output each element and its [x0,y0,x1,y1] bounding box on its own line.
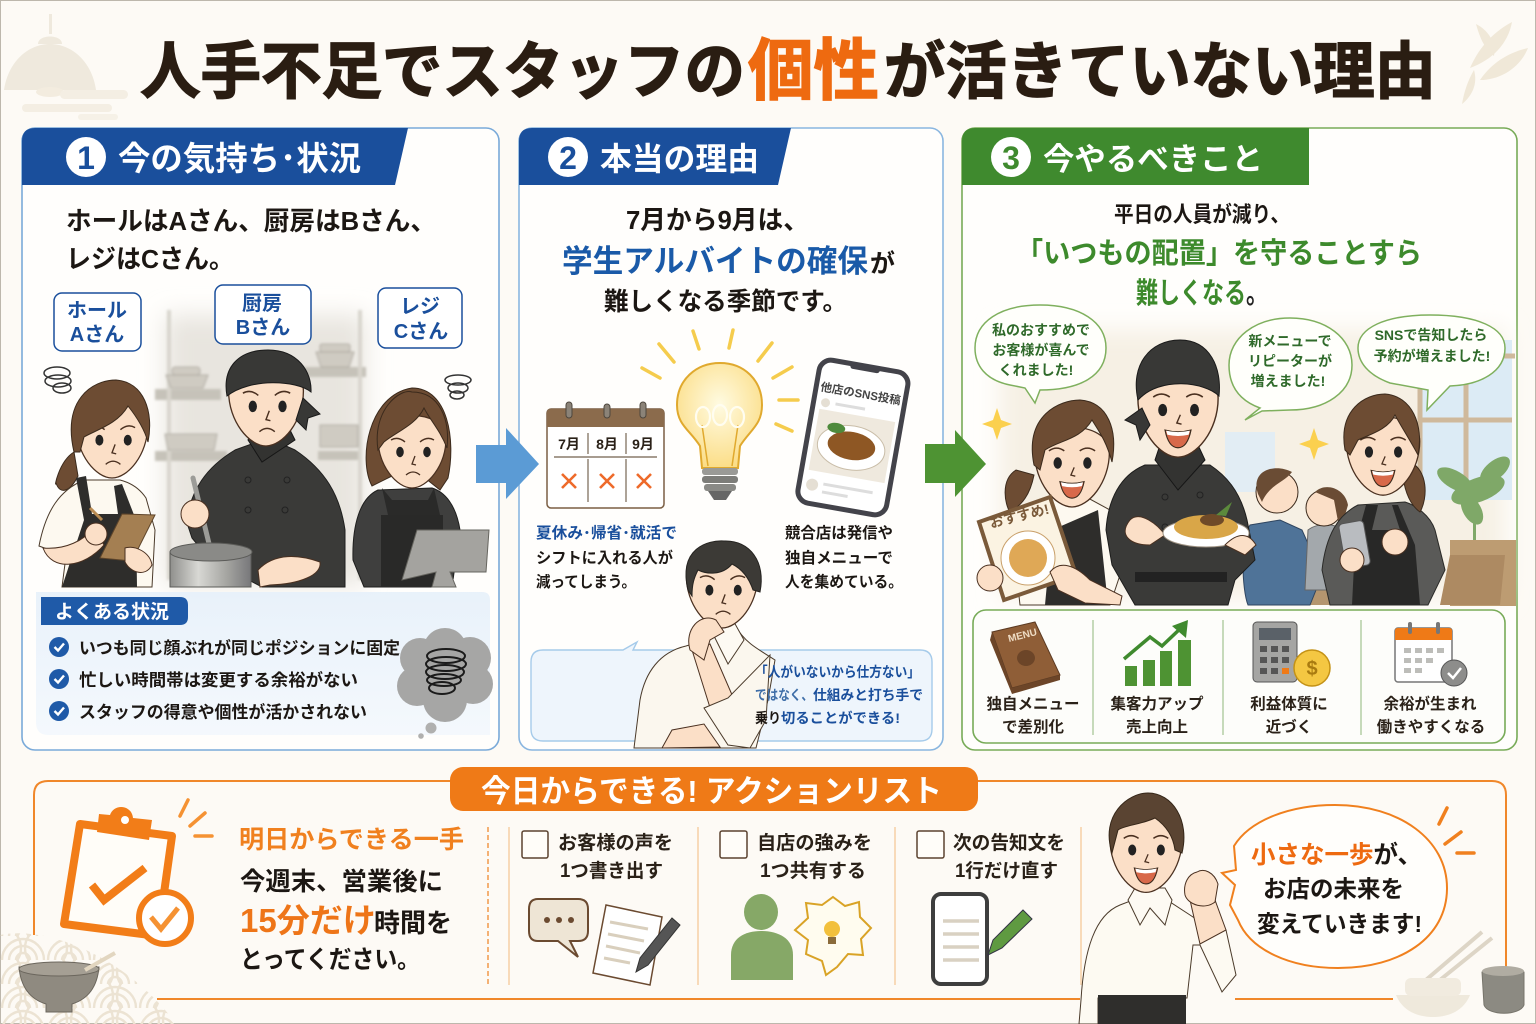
benefit: original menu: MENU [1007,627,1038,645]
situation item 2: 忙しい時間帯は変更する余裕がない [79,670,358,690]
panel 3 intro text: 難しくなる。 [1136,277,1268,310]
text: competitor reason: 独自メニューで [785,549,893,567]
benefit: sales up [1110,620,1204,736]
worry scribble icons [44,367,471,399]
action panel frame [34,781,1506,999]
speech bubble: new menu: リピーターが [1248,353,1332,369]
benefit: room to work: 余裕が生まれ [1383,694,1477,713]
title: 個性 [748,34,879,109]
sparkles [982,408,1329,460]
icon: calendar: 8月 [596,436,618,452]
action item: announcement: 1行だけ直す [955,860,1058,882]
speech bubble: recommendation: 私のおすすめで [992,322,1090,338]
benefit: room to work [1377,622,1485,736]
situation item 1: いつも同じ顔ぶれが同じポジションに固定 [79,638,400,658]
action item: store strengths: 1つ共有する [760,860,866,882]
icon: calendar [547,402,664,508]
action item: customer voice: 1つ書き出す [560,859,663,882]
panel 2 header: 本当の理由 [600,141,759,177]
icon: calendar: 9月 [632,436,654,452]
character: hall staff A [39,380,155,587]
label: hall [54,293,141,351]
character: staff with recommendation board [977,400,1125,605]
decoration: bamboo leaves [1462,22,1528,104]
speech bubble: message: 小さな一歩が、 [1251,840,1422,869]
panel 3 frame [962,128,1517,750]
speech bubble: SNS: 予約が増えました! [1374,348,1490,364]
text: competitor reason: 競合店は発信や [785,524,893,542]
title [140,34,1436,109]
decoration: hanging lamp [4,14,128,120]
dividers [487,827,489,985]
callout box [531,642,932,741]
action item: customer voice: お客様の声を [558,832,673,854]
title: 人手不足でスタッフの [140,38,745,107]
panel 2 intro text [562,205,895,316]
character: staff with phone [1322,394,1445,605]
label: hall: Aさん [70,323,124,346]
benefit: profit [1250,622,1330,736]
benefit: original menu [986,622,1080,736]
arrow: panel 2 to panel 3 [925,430,986,497]
label: kitchen: 厨房 [242,292,282,315]
restaurant background [1000,330,1516,606]
callout text: 切ることができる! [781,710,900,726]
panel 3 intro text: 「いつもの配置」を守ることすら [1016,237,1422,270]
panel 1 intro text: レジはCさん。 [66,244,234,274]
diners [1243,468,1348,605]
benefit: profit: 近づく [1266,718,1312,736]
arrow: panel 1 to panel 2 [476,428,539,499]
speech bubble: recommendation [975,305,1106,403]
kitchen background [155,310,366,585]
benefit: room to work: 働きやすくなる [1377,718,1485,736]
callout text: 「人がいないから仕方ない」 [755,664,920,680]
text: seasonal reason: 減ってしまう。 [536,573,636,591]
panel 1 intro text: ホールはAさん、厨房はBさん、 [66,206,436,236]
action item: store strengths [720,831,872,980]
panel 3 header [962,128,1309,185]
text: first step: 今週末、営業後に [240,868,443,896]
panel 1 header [22,128,408,185]
panel 1: current feelings [22,128,499,750]
benefit: profit: 利益体質に [1250,695,1328,713]
title: が活きていない理由 [884,38,1436,107]
panel 3: what to do now [962,128,1517,750]
speech bubble: recommendation: お客様が喜んで [992,342,1090,358]
character: cook B [170,350,345,587]
character: register staff C [353,388,489,587]
panel 2 intro text: 7月から9月は、 [626,205,809,235]
benefits box [973,610,1505,743]
speech bubble: SNS [1358,315,1505,410]
text: seasonal reason: シフトに入れる人が [536,548,673,567]
action ribbon: 今日からできる! アクションリスト [481,774,942,809]
speech bubble: message: お店の未来を [1263,876,1404,902]
label: register [378,288,462,348]
text: first step: 15分だけ [240,902,376,939]
benefit: sales up: 集客力アップ [1110,695,1204,713]
panel 3 header: 3 [1002,140,1020,176]
panel 2 intro text: が [870,249,895,278]
decoration: wave pattern and bowl [0,933,176,1024]
text: first step: とってください。 [240,946,420,974]
benefit: sales up: 売上向上 [1126,718,1188,736]
benefit: profit: $ [1306,658,1318,680]
panel 2 frame [519,128,943,750]
situation item 3: スタッフの得意や個性が活かされない [79,702,367,722]
speech bubble: new menu [1229,318,1352,420]
text: seasonal reason: 夏休み･帰省･就活で [536,524,677,542]
speech bubble: new menu: 増えました! [1251,373,1325,389]
benefit: original menu: で差別化 [1002,717,1064,736]
character: thinking manager [634,541,775,748]
icon: calendar: 7月 [558,436,580,452]
burst lines [1439,808,1474,853]
callout text: 乗り [755,710,781,726]
situation tag [41,597,188,625]
panel 3 intro text: 平日の人員が減り、 [1114,202,1290,227]
label: kitchen: Bさん [236,316,290,339]
panel 1 frame [22,128,499,750]
panel 2 header [519,128,791,185]
panel 3 header: 今やるべきこと [1043,142,1263,177]
common situations box [36,592,493,739]
bottom action panel [0,767,1524,1024]
text: first step: 時間を [374,908,452,938]
callout text: 仕組みと打ち手で [813,687,923,703]
panel 1 header: 1 [77,140,95,176]
icon: phone with SNS post [796,356,910,517]
label: register: Cさん [394,320,448,343]
text: first step: 明日からできる一手 [239,826,464,854]
speech bubble: message [1222,805,1447,968]
character: staff with recommendation board: おすすめ! [988,501,1051,531]
decoration: dishes and cup [1396,932,1524,1017]
situation tag: よくある状況 [55,601,169,623]
icon: clipboard [64,800,212,944]
panel 2 intro text: 難しくなる季節です。 [604,288,847,316]
thought cloud [397,628,493,739]
label: register: レジ [400,296,440,318]
panel 2 header: 2 [559,140,577,176]
action item: store strengths: 自店の強みを [757,832,872,854]
text: competitor reason: 人を集めている。 [785,573,903,591]
label: kitchen [215,285,311,344]
benefit: original menu: 独自メニュー [986,695,1080,713]
action item: customer voice [522,831,680,985]
action item: announcement: 次の告知文を [953,832,1065,854]
speech bubble: new menu: 新メニューで [1248,333,1332,349]
speech bubble: SNS: SNSで告知したら [1375,327,1487,343]
text: first step [239,826,464,974]
icon: phone with SNS post: 他店のSNS投稿 [819,380,902,408]
character: manager cheering [1079,793,1236,1024]
panel 2: real reasons [519,128,943,750]
speech bubble: recommendation: くれました! [999,362,1073,378]
panel 1 header: 今の気持ち･状況 [118,140,361,177]
character: chef with dish [1106,340,1256,605]
label: hall: ホール [67,300,127,322]
panel 2 intro text: 学生アルバイトの確保 [562,244,868,279]
icon: light bulb [642,330,798,500]
callout text: ではなく、 [755,687,813,703]
panel 3 intro text [1016,202,1422,310]
action item: announcement [917,831,1065,984]
speech bubble: message: 変えていきます! [1257,911,1422,937]
